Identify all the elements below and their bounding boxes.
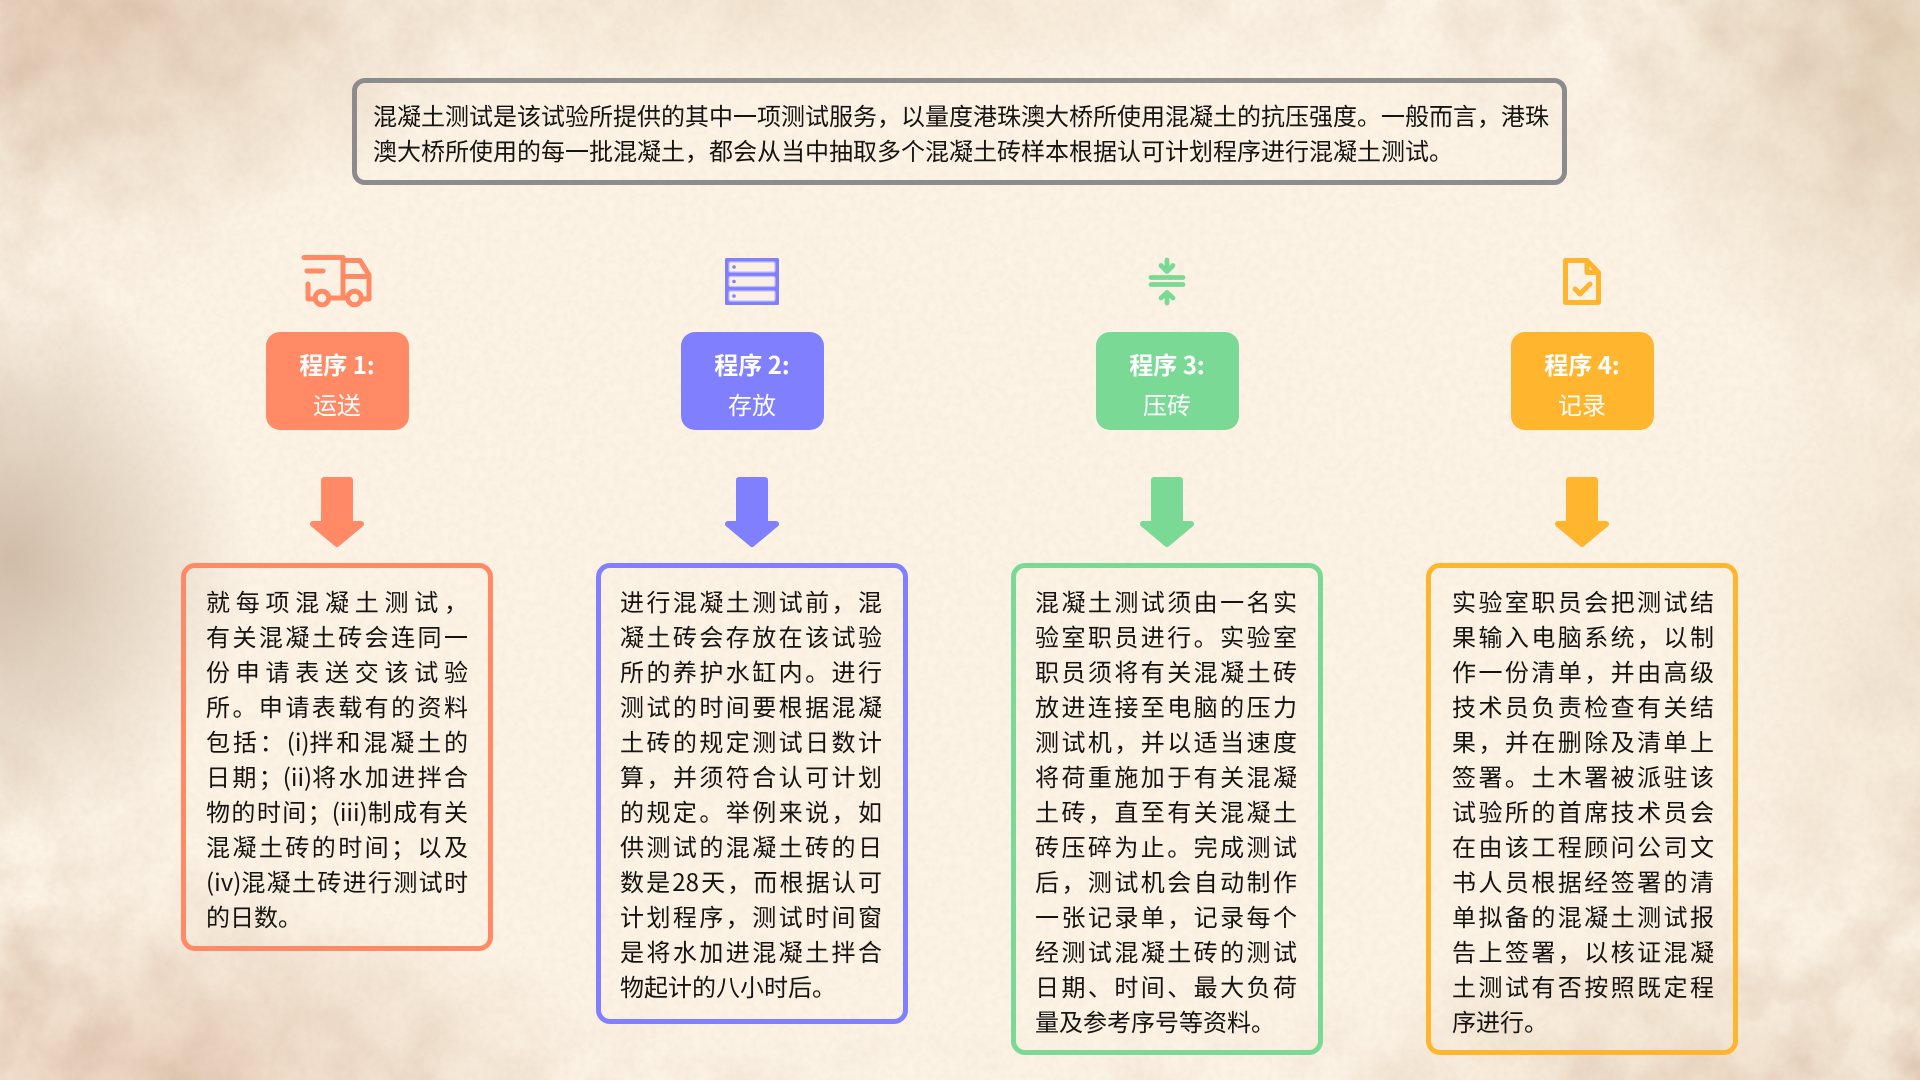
- panel: step 3 description: 混凝土测试须由一名实: [1035, 583, 1297, 618]
- panel: step 3 description: 量及参考序号等资料。: [1035, 1003, 1275, 1038]
- panel: step 3 description: 经测试混凝土砖的测试: [1035, 933, 1297, 968]
- panel: step 1 description: (iv)混: [206, 863, 265, 898]
- intro text panel: 混凝土测试是该试验所提供的其中一项测试服务，以量度港珠澳大桥所使用混凝土的抗压强度。一般而言，港珠: [373, 97, 1549, 132]
- panel: step 4 description: 在由该工程顾问公司文: [1452, 828, 1714, 863]
- panel: step 4 description: 试验所的首席技术员会: [1452, 793, 1714, 828]
- panel: step 4 description: 技术员负责检查有关结: [1452, 688, 1714, 723]
- panel: step 3 description: 放进连接至电脑的压力: [1035, 688, 1297, 723]
- intro text panel: [352, 78, 1567, 185]
- panel: step 4 description: 作一份清单，并由高级: [1452, 653, 1714, 688]
- step 3 badge: 压砖: [1143, 386, 1191, 421]
- panel: step 2 description: 土砖的规定测试日数计: [620, 723, 882, 758]
- panel: step 1 description: (i)拌: [287, 723, 334, 758]
- panel: step 4 description: 实验室职员会把测试结: [1452, 583, 1714, 618]
- panel: step 3 description: 职员须将有关混凝土砖: [1035, 653, 1297, 688]
- step 1 badge: 程序 1:: [299, 346, 375, 381]
- step 3 badge: 程序 3:: [1129, 346, 1205, 381]
- panel: step 1 description: (iii)制: [332, 793, 392, 828]
- panel: step 1 description: 的日数。: [206, 898, 302, 933]
- panel: step 1 description: 份申请表送交该试验: [206, 653, 468, 688]
- panel: step 2 description: 所的养护水缸内。进行: [620, 653, 882, 688]
- panel: step 4 description: 序进行。: [1452, 1003, 1548, 1038]
- panel: step 1 description: 日期； 水加进拌合: [206, 758, 468, 793]
- step 3 badge: [1096, 332, 1238, 430]
- panel: step 2 description: 计划程序，测试时间窗: [620, 898, 882, 933]
- panel: step 2 description: 进行混凝土测试前，混: [620, 583, 882, 618]
- step 2 badge: [680, 332, 824, 430]
- panel: step 1 description: 凝土砖进行测试时: [265, 863, 468, 898]
- panel: step 4 description: 单拟备的混凝土测试报: [1452, 898, 1714, 933]
- panel: step 1 description: 包括： 和混凝土的: [206, 723, 468, 758]
- panel: step 2 description: 供测试的混凝土砖的日: [620, 828, 882, 863]
- panel: step 4 description: 签署。土木署被派驻该: [1452, 758, 1714, 793]
- panel: step 4 description: 果，并在删除及清单上: [1452, 723, 1714, 758]
- panel: step 2 description: 测试的时间要根据混凝: [620, 688, 882, 723]
- panel: step 1 description: 所。申请表载有的资料: [206, 688, 468, 723]
- step 2 badge: 存放: [728, 386, 776, 421]
- panel: step 2 description: 数是28天，而根据认可: [620, 863, 882, 898]
- panel: step 2 description: 凝土砖会存放在该试验: [620, 618, 882, 653]
- panel: step 2 description: 算，并须符合认可计划: [620, 758, 882, 793]
- panel: step 3 description: 测试机，并以适当速度: [1035, 723, 1297, 758]
- step 4 badge: [1510, 332, 1654, 430]
- panel: step 3 description: 砖压碎为止。完成测试: [1035, 828, 1297, 863]
- panel: step 3 description: [1011, 563, 1323, 1055]
- panel: step 2 description: 物起计的八小时后。: [620, 968, 836, 1003]
- panel: step 3 description: 验室职员进行。实验室: [1035, 618, 1297, 653]
- step 2 badge: 程序 2:: [714, 346, 790, 381]
- panel: step 1 description: 有关混凝土砖会连同一: [206, 618, 468, 653]
- panel: step 1 description: 就每项混凝土测试，: [206, 583, 468, 618]
- panel: step 1 description: (ii)将: [283, 758, 336, 793]
- panel: step 1 description: [181, 563, 493, 951]
- panel: step 1 description: 物的时间； 成有关: [206, 793, 468, 828]
- step 4 badge: 记录: [1558, 386, 1606, 421]
- panel: step 3 description: 一张记录单，记录每个: [1035, 898, 1297, 933]
- step 4 badge: 程序 4:: [1544, 346, 1620, 381]
- panel: step 4 description: [1426, 563, 1738, 1055]
- panel: step 4 description: 告上签署，以核证混凝: [1452, 933, 1714, 968]
- panel: step 4 description: 土测试有否按照既定程: [1452, 968, 1714, 1003]
- panel: step 3 description: 后，测试机会自动制作: [1035, 863, 1297, 898]
- step 1 badge: 运送: [313, 386, 361, 421]
- panel: step 3 description: 将荷重施加于有关混凝: [1035, 758, 1297, 793]
- panel: step 4 description: 书人员根据经签署的清: [1452, 863, 1714, 898]
- panel: step 1 description: 混凝土砖的时间；以及: [206, 828, 468, 863]
- panel: step 3 description: 土砖，直至有关混凝土: [1035, 793, 1297, 828]
- panel: step 2 description: 是将水加进混凝土拌合: [620, 933, 882, 968]
- panel: step 2 description: [596, 563, 908, 1024]
- step 1 badge: [266, 332, 408, 430]
- intro text panel: 澳大桥所使用的每一批混凝土，都会从当中抽取多个混凝土砖样本根据认可计划程序进行混凝土测试。: [373, 132, 1453, 167]
- panel: step 4 description: 果输入电脑系统，以制: [1452, 618, 1714, 653]
- panel: step 2 description: 的规定。举例来说，如: [620, 793, 882, 828]
- panel: step 3 description: 日期、时间、最大负荷: [1035, 968, 1297, 1003]
